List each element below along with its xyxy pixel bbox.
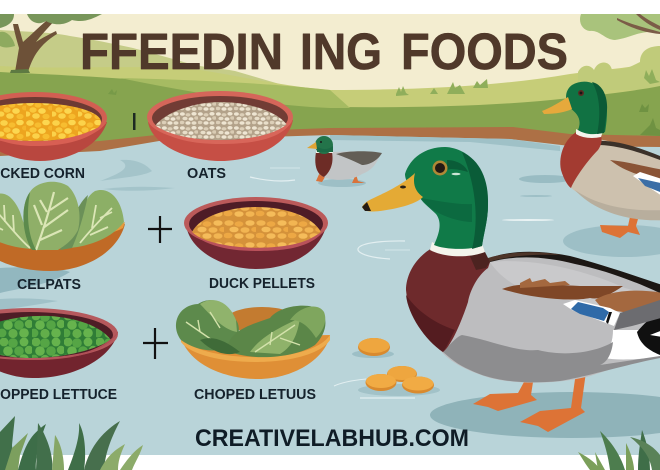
breast: [406, 248, 490, 352]
distant bushes: [578, 46, 660, 73]
tree: top right: [580, 14, 660, 40]
wing feather: brown: [502, 284, 623, 300]
title: [82, 32, 566, 70]
lettuce leaves: [176, 300, 325, 357]
bank edge: [0, 127, 660, 156]
grass: bottom left: [0, 416, 143, 470]
upper flank: [490, 261, 660, 318]
label: duck pellets: DUCK PELLETS: [209, 276, 315, 292]
light meadow: [0, 66, 636, 108]
label: celpats: CELPATS: [17, 277, 81, 293]
breast: [560, 131, 602, 188]
grass: bottom right: [578, 430, 660, 470]
brown wing: [610, 160, 660, 179]
pond water: [0, 135, 660, 455]
eye: [432, 160, 448, 176]
mid green slope at centre: [120, 78, 350, 108]
plus sign: [148, 216, 172, 243]
coins: duck food on water: [352, 338, 440, 396]
leaf: left: [0, 194, 32, 249]
title: FOODS: [401, 23, 568, 80]
collar: [430, 242, 485, 256]
title: ING: [300, 23, 382, 80]
feet: [600, 218, 640, 238]
main duck: [362, 147, 660, 438]
white rump: [604, 330, 660, 360]
plus sign: [143, 328, 168, 359]
back foot: [473, 382, 537, 411]
leaf: right: [60, 190, 124, 250]
sky: [0, 14, 660, 90]
bowl: oats: [147, 91, 293, 161]
bowl: cracked corn: [0, 92, 107, 161]
water shadow: [430, 392, 660, 438]
head and neck: [566, 82, 607, 134]
bowl: peas: [0, 308, 118, 378]
back: [598, 141, 660, 162]
bill: [362, 173, 423, 212]
website text: CREATIVELABHUB.COM: [195, 425, 469, 452]
eye: [578, 90, 584, 96]
front foot: [520, 372, 586, 432]
label: oats: OATS: [187, 166, 226, 182]
bill: [542, 97, 572, 114]
water ripples: [0, 160, 571, 398]
lower body shadow: [443, 335, 660, 382]
head and neck: [405, 147, 488, 249]
upper right duck: [542, 82, 660, 257]
tail dark: [637, 308, 660, 358]
bowl: lettuce (celpats): [0, 182, 125, 271]
neck shadow: [468, 250, 490, 270]
bowl: chopped lettuce: [176, 300, 330, 379]
back stripe: [490, 252, 660, 297]
bowl: duck pellets: [184, 197, 328, 269]
green bank: [0, 72, 660, 145]
collar: [576, 129, 603, 138]
leaf: centre: [23, 182, 80, 250]
small duck: [307, 136, 382, 187]
speculum: [563, 300, 620, 326]
tree: top left: [0, 14, 102, 73]
body: [440, 253, 660, 383]
blue speculum: [633, 172, 660, 198]
label: choped letuus: CHOPED LETUUS: [194, 387, 316, 403]
tufts of grass on bank: [108, 69, 660, 136]
body: [570, 135, 660, 220]
title: FFEEDIN: [80, 23, 283, 80]
water shadow: [563, 225, 660, 257]
water shadow at far edge: [330, 135, 560, 151]
far hill left: [0, 30, 278, 84]
separator mark: [133, 113, 136, 130]
